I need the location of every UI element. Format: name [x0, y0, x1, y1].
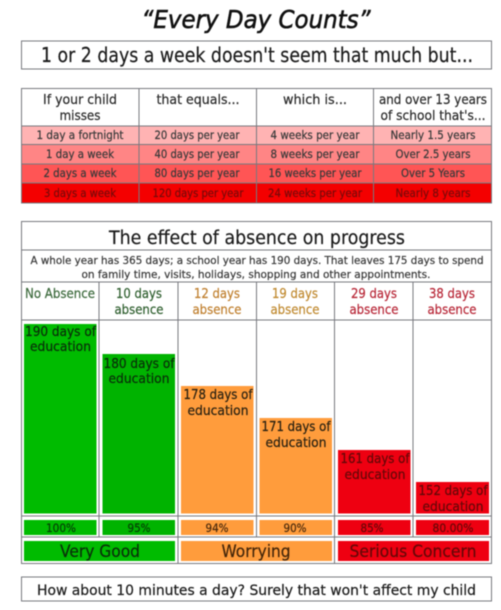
column headers	[25, 286, 476, 318]
row: 2 days a week: 2 days a week	[44, 166, 117, 180]
percentage row: 100%	[46, 521, 76, 535]
column headers: 10 days	[116, 286, 162, 302]
bar: 161 days: 161 days of	[340, 451, 411, 467]
bar: 152 days: 152 days of	[418, 483, 489, 499]
row: 1 day a fortnight: 1 day a fortnight	[36, 128, 124, 142]
panel heading: The effect of absence on progress	[108, 228, 405, 249]
bar: 171 days	[260, 418, 332, 514]
column headers: absence	[114, 302, 164, 318]
table header row: misses	[60, 108, 100, 124]
row: 2 days a week: Over 5 Years	[401, 166, 465, 180]
bar: 152 days	[416, 482, 489, 515]
row: 2 days a week: 16 weeks per year	[268, 166, 362, 180]
column headers: absence	[428, 302, 476, 318]
rating: Very Good	[24, 541, 175, 561]
bar: 152 days: education	[422, 499, 484, 515]
bar: 171 days: 171 days of	[262, 419, 332, 435]
percentage row: 80.00%	[432, 521, 474, 535]
percentage row	[24, 520, 489, 535]
bar: 180 days	[102, 354, 176, 514]
panel: absence table	[21, 88, 492, 203]
row: 1 day a fortnight: 20 days per year	[154, 128, 240, 142]
column headers: absence	[350, 302, 398, 318]
intro text: on family time, visits, holidays, shopping and other appointments.	[82, 268, 430, 281]
bar: 178 days: education	[188, 403, 248, 419]
row: 1 day a week	[46, 147, 470, 161]
table grid	[21, 88, 492, 203]
percentage row: 85%	[360, 521, 384, 535]
column headers: 19 days	[272, 286, 318, 302]
closing question box	[22, 577, 492, 601]
table header row	[43, 92, 487, 124]
table header row: which is...	[283, 92, 347, 108]
closing question box: How about 10 minutes a day? Surely that won't affect my child	[37, 583, 476, 599]
table header row: that equals...	[156, 92, 240, 108]
percentage row: 95%	[128, 521, 151, 535]
row: 3 days a week: Nearly 8 years	[396, 186, 471, 200]
row: 2 days a week	[44, 166, 465, 180]
table header row: If your child	[43, 92, 117, 108]
bar: 190 days: 190 days of	[25, 324, 97, 340]
bar: 178 days	[181, 386, 254, 514]
row: 1 day a fortnight: 4 weeks per year	[270, 128, 360, 142]
row: 3 days a week: 24 weeks per year	[268, 186, 362, 200]
row: 1 day a fortnight	[36, 128, 476, 142]
title: “Every Day Counts”	[142, 5, 371, 34]
percentage row: 90%	[284, 521, 307, 535]
percentage row: 94%	[206, 521, 229, 535]
panel: effect of absence on progress	[21, 222, 492, 564]
panel grid	[21, 222, 492, 564]
column headers: 38 days	[429, 286, 475, 302]
bar: 171 days: education	[266, 435, 326, 451]
rating: Serious Concern: Serious Concern	[350, 542, 476, 561]
column headers: absence	[192, 302, 242, 318]
table header row: and over 13 years	[379, 92, 487, 108]
bar: 190 days: education	[30, 339, 91, 355]
row: 3 days a week	[44, 186, 471, 200]
rating: Worrying: Worrying	[222, 542, 290, 561]
row: 1 day a week: 1 day a week	[46, 147, 114, 161]
rating: Worrying	[181, 541, 332, 561]
row: 1 day a week: 40 days per year	[154, 147, 240, 161]
bar: 180 days: 180 days of	[104, 356, 176, 372]
bar: 161 days: education	[344, 467, 406, 483]
row: 3 days a week: 120 days per year	[152, 186, 244, 200]
column headers: No Absence	[25, 286, 95, 302]
bar: 180 days: education	[108, 371, 170, 387]
bar: 161 days	[338, 450, 411, 514]
intro text: A whole year has 365 days; a school year has 190 days. That leaves 175 days to spend	[30, 254, 484, 267]
table row fills	[21, 126, 491, 203]
bar: 190 days	[24, 324, 97, 514]
row: 1 day a fortnight: Nearly 1.5 years	[390, 128, 476, 142]
bar: 178 days: 178 days of	[184, 387, 254, 403]
rating: Very Good: Very Good	[60, 542, 140, 561]
intro text	[30, 254, 484, 281]
row: 1 day a week: 8 weeks per year	[270, 147, 360, 161]
table header row: of school that's...	[380, 108, 486, 124]
column headers: absence	[270, 302, 320, 318]
column headers: 29 days	[351, 286, 397, 302]
row: 2 days a week: 80 days per year	[154, 166, 240, 180]
row: 3 days a week: 3 days a week	[44, 186, 116, 200]
column headers: 12 days	[194, 286, 240, 302]
row: 1 day a week: Over 2.5 years	[396, 147, 470, 161]
